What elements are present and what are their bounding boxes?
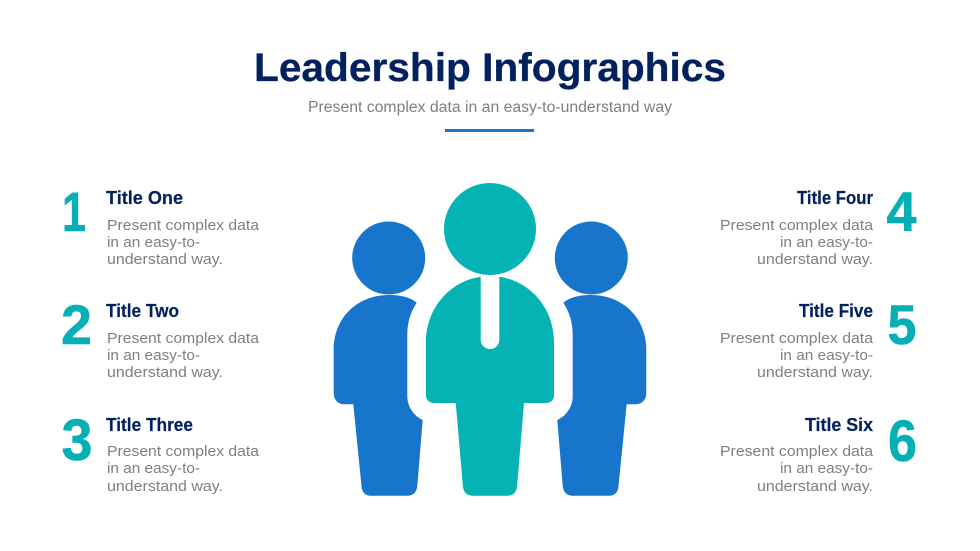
center leader with tie [426,183,554,496]
body 5: understand way. [757,364,873,381]
item 5 [720,293,916,381]
item 1 [62,180,260,268]
body 3: understand way. [107,478,223,495]
number 5: 5 [888,293,916,356]
heading 5: Title Five [799,301,873,321]
title: Leadership Infographics [254,46,726,90]
icon: three people leadership group [334,183,646,496]
body 5: in an easy-to- [780,347,873,364]
body 6: understand way. [757,478,873,495]
heading 1: Title One [106,188,183,208]
body 6: in an easy-to- [780,460,873,477]
body 2: Present complex data [107,330,260,347]
item 6 [720,409,917,495]
item 2 [61,293,260,381]
heading 4: Title Four [797,188,873,208]
body 1: understand way. [107,251,223,268]
body 5: Present complex data [720,330,874,347]
heading 2: Title Two [106,301,179,321]
left person [334,222,425,496]
title underline [445,129,534,132]
body 2: in an easy-to- [107,347,200,364]
body 4: in an easy-to- [780,234,873,251]
number 3: 3 [62,408,92,473]
number 4: 4 [886,180,916,243]
subtitle: Present complex data in an easy-to-understand way [308,99,672,116]
body 4: understand way. [757,251,873,268]
body 3: in an easy-to- [107,460,200,477]
number 6: 6 [888,409,917,474]
heading 3: Title Three [106,415,193,435]
body 1: Present complex data [107,217,260,234]
right person [555,222,646,496]
body 6: Present complex data [720,443,874,460]
number 2: 2 [61,293,92,356]
item 3 [62,408,260,495]
number 1: 1 [62,180,86,243]
body 4: Present complex data [720,217,874,234]
heading 6: Title Six [805,415,873,435]
item 4 [720,180,916,268]
body 3: Present complex data [107,443,260,460]
body 1: in an easy-to- [107,234,200,251]
body 2: understand way. [107,364,223,381]
